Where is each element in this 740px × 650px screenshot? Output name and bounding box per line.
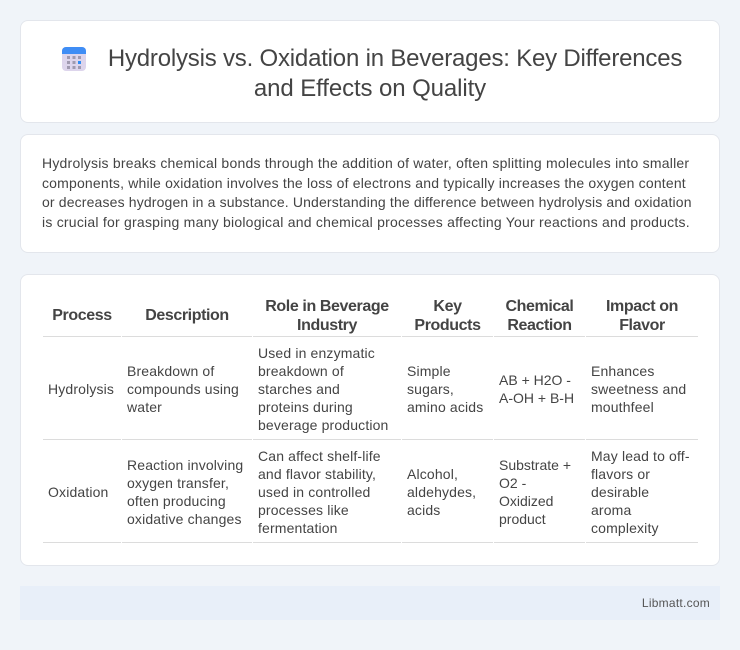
table row: hydrolysis: Breakdown of: [127, 363, 214, 379]
table header: Chemical: [506, 298, 573, 315]
table row: oxidation: May lead to off-: [591, 448, 690, 464]
table row: oxidation: [48, 448, 690, 536]
table header: Process: [52, 307, 112, 324]
table header: Role in Beverage: [265, 298, 389, 315]
intro paragraph: or decreases hydrogen in a substance. Understanding the difference between hydrolysis and oxidation: [42, 194, 692, 210]
table row: hydrolysis: beverage production: [258, 417, 388, 433]
table row: hydrolysis: A-OH + B-H: [499, 390, 574, 406]
table row: hydrolysis: sweetness and: [591, 381, 686, 397]
title: and Effects on Quality: [254, 75, 486, 102]
table header: Flavor: [619, 317, 665, 334]
table row: hydrolysis: starches and: [258, 381, 340, 397]
table row: hydrolysis: Used in enzymatic: [258, 345, 375, 361]
table row: oxidation: often producing: [127, 493, 226, 509]
table header: Key: [433, 298, 462, 315]
table row: hydrolysis: [48, 345, 686, 433]
title: Hydrolysis vs. Oxidation in Beverages: Key Differences: [108, 45, 682, 72]
title: [108, 45, 682, 102]
table row: oxidation: Can affect shelf-life: [258, 448, 381, 464]
table row: oxidation: aroma: [591, 502, 631, 518]
table row: oxidation: flavors or: [591, 466, 650, 482]
table row: oxidation: processes like: [258, 502, 349, 518]
table row: hydrolysis: Hydrolysis: [48, 381, 114, 397]
table row: hydrolysis: compounds using: [127, 381, 239, 397]
panel: title header: [20, 20, 720, 123]
footer bar: [20, 586, 720, 620]
table row: hydrolysis: breakdown of: [258, 363, 344, 379]
table row: oxidation: O2 -: [499, 475, 526, 491]
panel: comparison table: [20, 274, 720, 566]
table header: [52, 298, 678, 334]
table row: hydrolysis: amino acids: [407, 399, 483, 415]
table row: oxidation: oxidative changes: [127, 511, 242, 527]
table row: oxidation: aldehydes,: [407, 484, 476, 500]
table row: oxidation: Alcohol,: [407, 466, 458, 482]
intro paragraph: components, while oxidation involves the loss of electrons and typically increases the oxygen content: [42, 174, 686, 190]
table row: oxidation: used in controlled: [258, 484, 370, 500]
table row: oxidation: Substrate +: [499, 457, 571, 473]
table row: hydrolysis: water: [127, 399, 162, 415]
table header: Description: [145, 307, 229, 324]
table row: oxidation: product: [499, 511, 546, 527]
intro paragraph: [42, 155, 692, 230]
table header: Impact on: [606, 298, 678, 315]
table row: oxidation: complexity: [591, 520, 659, 536]
table header: Industry: [297, 317, 357, 334]
table row: oxidation: fermentation: [258, 520, 338, 536]
table row: hydrolysis: Enhances: [591, 363, 654, 379]
table row: oxidation: Oxidation: [48, 484, 108, 500]
table row: oxidation: oxygen transfer,: [127, 475, 229, 491]
table row: hydrolysis: proteins during: [258, 399, 353, 415]
table row: hydrolysis: sugars,: [407, 381, 454, 397]
table row: oxidation: and flavor stability,: [258, 466, 376, 482]
table header: Products: [414, 317, 481, 334]
table row: oxidation: desirable: [591, 484, 649, 500]
footer credit: Libmatt.com: [642, 596, 710, 610]
intro paragraph: Hydrolysis breaks chemical bonds through the addition of water, often splitting molecules into smaller: [42, 155, 689, 171]
table row: oxidation: Oxidized: [499, 493, 553, 509]
table row: hydrolysis: mouthfeel: [591, 399, 654, 415]
panel: introduction text: [20, 134, 720, 253]
intro paragraph: is crucial for grasping many biological and chemical processes affecting Your reactions and products.: [42, 214, 690, 230]
table row: hydrolysis: AB + H2O -: [499, 372, 571, 388]
table row: oxidation: acids: [407, 502, 440, 518]
icon: calendar: [62, 47, 86, 71]
table header: Reaction: [507, 317, 572, 334]
table row: hydrolysis: Simple: [407, 363, 451, 379]
table row: oxidation: Reaction involving: [127, 457, 243, 473]
